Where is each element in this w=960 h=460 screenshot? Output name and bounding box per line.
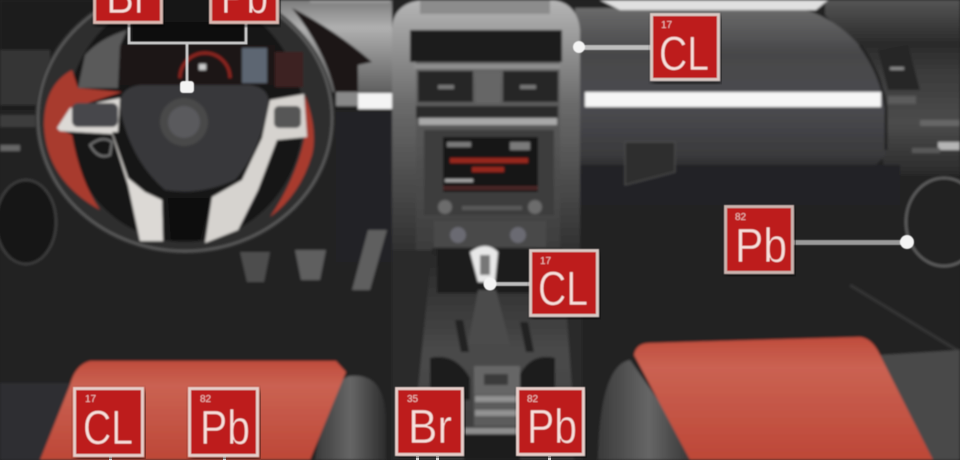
tile: bromine in console: 35 (407, 394, 419, 405)
tile: chlorine on dashboard: 17 (661, 20, 673, 31)
tile: lead in door speaker: Pb (735, 220, 787, 273)
glovebox handle (625, 142, 675, 185)
dash seam (860, 45, 886, 150)
left spoke (57, 98, 163, 241)
tile: lead in console (518, 388, 584, 454)
tile: lead in console: 82 (527, 394, 539, 405)
radio unit (424, 130, 554, 215)
tile: lead in door speaker (726, 206, 792, 273)
tile: chlorine on gear lever: CL (538, 263, 588, 316)
airbag hub (120, 85, 269, 192)
tile: chlorine on dashboard: CL (659, 28, 709, 81)
upper left spoke shroud (78, 30, 127, 88)
red wheel inserts (44, 70, 122, 210)
tile: chlorine in seat (74, 388, 142, 456)
right spoke (205, 94, 307, 243)
tile: bromine in console (396, 388, 462, 454)
centre tunnel and gear lever (392, 246, 582, 460)
pedals (240, 230, 387, 290)
instrument cluster (120, 45, 303, 87)
steering wheel (35, 0, 335, 254)
tile: chlorine on dashboard (652, 14, 718, 81)
right seat (598, 337, 960, 460)
left seat (0, 361, 386, 460)
tile: bromine in console: Br (408, 401, 452, 454)
chrome trim strip (585, 92, 881, 107)
callout: dashboard connector (573, 41, 652, 53)
door seat line (850, 285, 960, 352)
centre console (392, 0, 580, 262)
tile: chlorine in seat: CL (83, 402, 133, 455)
tile: lead in seat (190, 388, 258, 456)
tile: lead in door speaker: 82 (735, 212, 747, 223)
top right corner (825, 0, 960, 175)
right air vent (906, 178, 960, 266)
left air vent (0, 180, 56, 264)
spoke buttons (72, 103, 118, 127)
climate controls (434, 200, 546, 247)
dark cluster recess (133, 22, 243, 42)
gear lever knob (470, 246, 498, 282)
tile: chlorine on gear lever: 17 (540, 256, 552, 267)
callout: door speaker connector (792, 235, 914, 249)
tile: lead in seat: Pb (200, 402, 250, 455)
wheel emblem (160, 98, 208, 146)
callout: gear lever connector (484, 278, 531, 290)
windscreen glare (600, 0, 828, 10)
tile: lead in console: Pb (527, 401, 577, 454)
left dashboard (0, 0, 392, 262)
callout: seat connector stubs (109, 456, 551, 460)
right side vent (878, 45, 920, 104)
callout: cluster connector (129, 22, 246, 93)
right dashboard panel (575, 8, 885, 172)
column stalk (90, 139, 112, 156)
lower spoke opening (168, 198, 210, 240)
tile: lead in seat: 82 (200, 394, 212, 405)
tile: chlorine in seat: 17 (85, 394, 97, 405)
dashboard lower edge shading (570, 165, 900, 205)
right door trim (912, 120, 960, 153)
air vents (418, 71, 558, 103)
